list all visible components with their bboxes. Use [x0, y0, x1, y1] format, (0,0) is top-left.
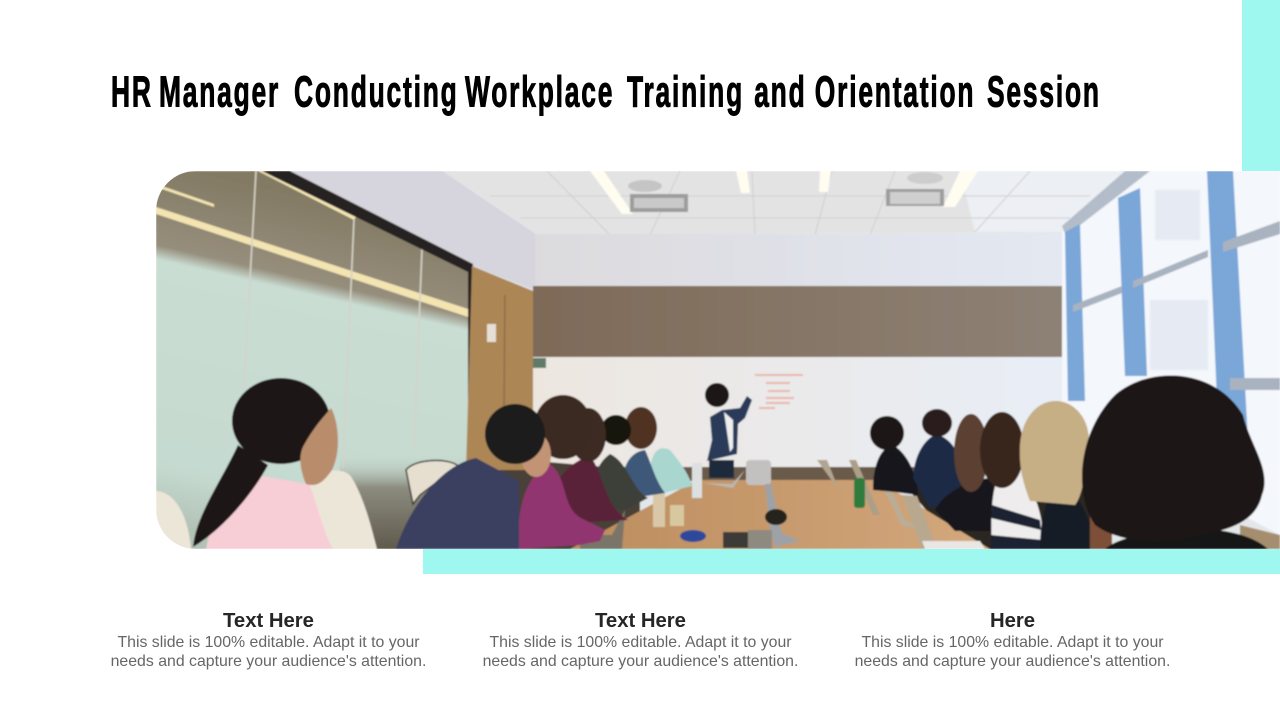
accent bar: under photo — [423, 549, 1280, 574]
glass wall — [156, 171, 546, 549]
title: Orientation — [815, 66, 984, 116]
presenter — [705, 383, 752, 478]
title: Workplace — [465, 66, 623, 116]
text block: left: Text Here — [223, 610, 314, 632]
text block: left: This slide is 100% editable. Adapt it to your — [117, 634, 420, 651]
wood panel — [533, 286, 1064, 357]
window beam — [1062, 171, 1150, 236]
title — [111, 66, 1101, 116]
laptops and objects — [580, 460, 985, 549]
chairs — [156, 460, 458, 549]
title: Training — [627, 66, 753, 116]
text block: right: needs and capture your audience's attention. — [855, 653, 1170, 670]
conference table — [570, 480, 990, 549]
title: and — [754, 66, 816, 116]
text block: left: needs and capture your audience's attention. — [111, 653, 426, 670]
text block: right: This slide is 100% editable. Adapt it to your — [861, 634, 1164, 651]
back wall — [538, 234, 710, 286]
windows — [1062, 171, 1280, 549]
table back strip — [624, 466, 916, 482]
title: Session — [987, 66, 1101, 116]
left wall — [290, 171, 537, 291]
outside building hint — [1150, 190, 1208, 370]
wooden door — [466, 266, 533, 470]
title: Manager — [159, 66, 289, 116]
ceiling — [440, 171, 1130, 235]
ceiling vents — [628, 172, 944, 212]
ceiling lights — [590, 171, 978, 214]
attendees: left side — [193, 378, 692, 549]
attendees: right side — [870, 375, 1268, 549]
text block: center: Text Here — [595, 610, 686, 632]
ceiling tile grid — [490, 171, 1090, 235]
text block: center — [483, 610, 798, 670]
whiteboard notes — [755, 374, 803, 409]
title: HR — [111, 66, 162, 116]
room background — [290, 171, 1278, 549]
title: Conducting — [294, 66, 468, 116]
text block: left — [111, 610, 426, 670]
photo: meeting room training session — [156, 171, 1280, 549]
text block: right: Here — [990, 610, 1035, 632]
whiteboard — [533, 357, 1064, 467]
text block: center: needs and capture your audience's attention. — [483, 653, 798, 670]
accent bar: top right — [1242, 0, 1280, 171]
text block: center: This slide is 100% editable. Adapt it to your — [489, 634, 792, 651]
shadow behind attendees — [498, 461, 641, 549]
text block: right — [855, 610, 1170, 670]
